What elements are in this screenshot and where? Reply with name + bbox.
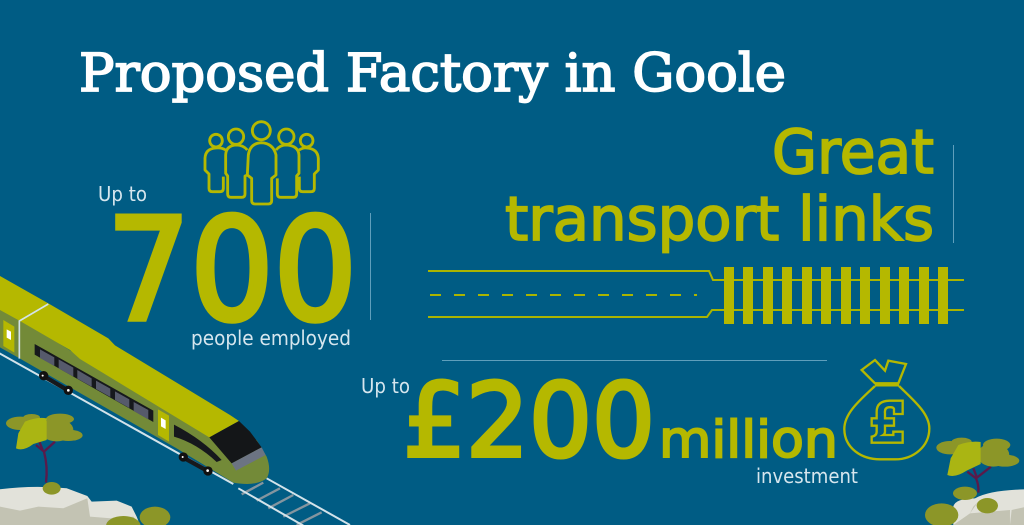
illustration: high-speed train <box>0 276 269 484</box>
train roof <box>0 276 239 437</box>
train wheels <box>39 371 213 476</box>
train cab side window <box>174 425 222 462</box>
icon: road merging into railway <box>428 267 964 324</box>
train windscreen <box>209 421 262 463</box>
text: up to (jobs): Up to <box>98 182 147 206</box>
divider: above investment <box>442 360 827 361</box>
heading: great transport links <box>505 117 934 255</box>
foliage <box>6 414 83 449</box>
illustration: right tree and rock <box>925 438 1024 525</box>
train front stripe <box>232 447 266 471</box>
text: up to (investment): Up to <box>361 374 410 398</box>
train side window band <box>35 344 153 422</box>
foliage <box>936 438 1019 476</box>
rock <box>0 487 140 525</box>
rock <box>953 489 1024 525</box>
shrubs <box>925 487 998 525</box>
heading: great transport links: Great <box>772 117 934 188</box>
big number: 700: 700 <box>107 189 357 353</box>
text: million: million <box>659 411 838 470</box>
illustration: left tree and rock <box>0 414 170 525</box>
train body <box>0 307 269 484</box>
heading: great transport links: transport links <box>505 184 934 255</box>
icon: group of people <box>205 122 318 204</box>
text: investment: investment <box>756 464 858 488</box>
shrubs <box>43 482 170 525</box>
trunk <box>36 442 55 483</box>
text: people employed: people employed <box>191 326 351 350</box>
train rear door <box>3 320 14 353</box>
title: Proposed Factory in Goole <box>79 44 786 104</box>
train door <box>158 409 169 442</box>
big number: 200 pounds: £200 <box>403 362 655 481</box>
icon: money bag <box>844 360 929 459</box>
trunk <box>967 467 991 493</box>
divider: beside 700 <box>370 213 371 320</box>
carriage gap <box>19 304 48 359</box>
divider: beside transport heading <box>953 145 954 243</box>
illustration: railway track under train <box>0 353 350 525</box>
